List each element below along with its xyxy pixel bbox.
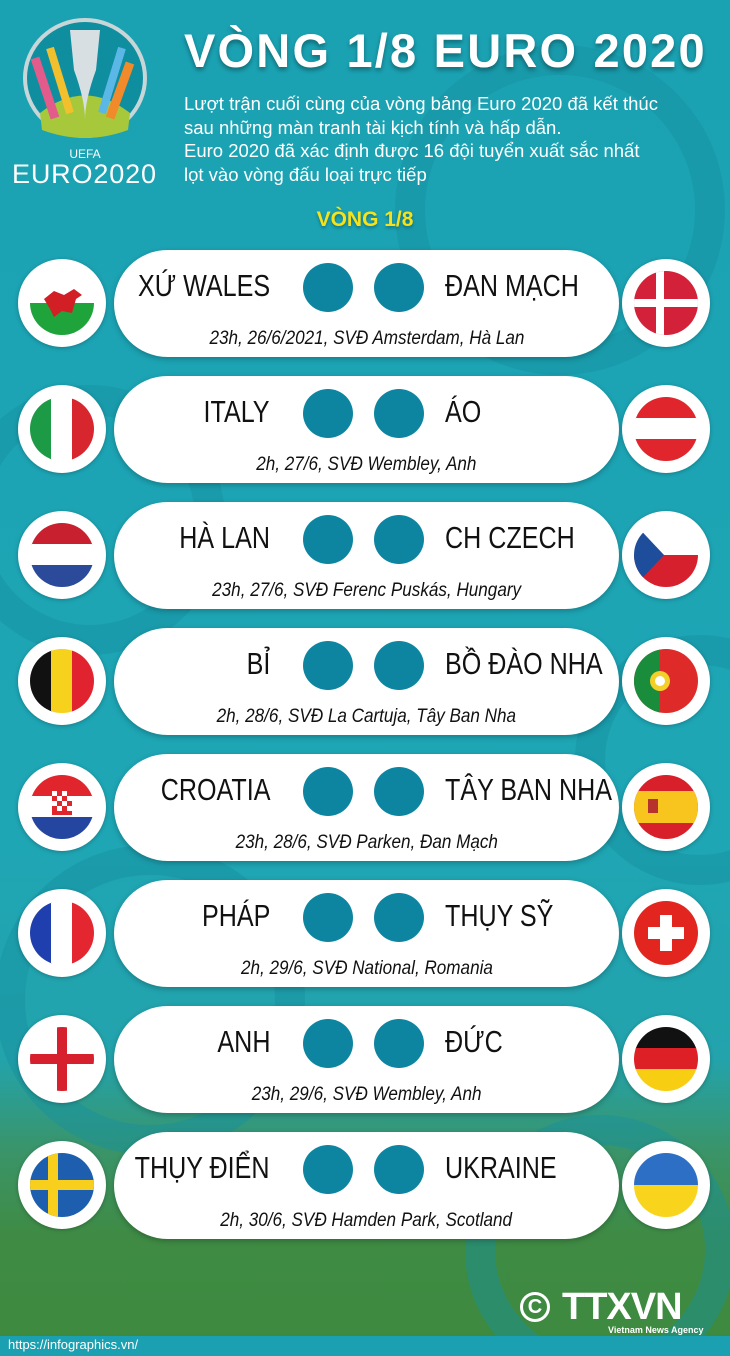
match 5: TÂY BAN NHA [445, 772, 612, 807]
match 5 [16, 754, 712, 866]
logo: TTXVN copyright: Vietnam News Agency [608, 1325, 704, 1335]
intro text [184, 93, 658, 185]
match 4: BỒ ĐÀO NHA [445, 646, 603, 681]
match 7: ĐỨC [445, 1024, 503, 1059]
intro text: lọt vào vòng đấu loại trực tiếp [184, 164, 427, 184]
match 1: ĐAN MẠCH [445, 268, 579, 303]
match 5: 23h, 28/6, SVĐ Parken, Đan Mạch [235, 832, 498, 853]
match 3 [16, 502, 712, 614]
match 3: HÀ LAN [179, 520, 270, 555]
logo: TTXVN copyright: TTXVN [562, 1286, 682, 1328]
match 3: CH CZECH [445, 520, 575, 555]
logo: euro 2020 [12, 18, 156, 188]
match 4: 2h, 28/6, SVĐ La Cartuja, Tây Ban Nha [217, 706, 516, 727]
logo: euro 2020: UEFA [69, 147, 101, 161]
match 2: 2h, 27/6, SVĐ Wembley, Anh [256, 454, 477, 475]
match 8: THỤY ĐIỂN [135, 1150, 270, 1185]
match 1 [16, 250, 712, 362]
subheading: VÒNG 1/8 [317, 208, 413, 231]
logo: TTXVN copyright [520, 1286, 704, 1335]
match 8: UKRAINE [445, 1150, 557, 1185]
intro text: Lượt trận cuối cùng của vòng bảng Euro 2020 đã kết thúc [184, 93, 658, 114]
match 6: PHÁP [202, 898, 270, 933]
logo: TTXVN copyright: C [528, 1296, 542, 1318]
match 6 [16, 880, 712, 992]
match 1: 23h, 26/6/2021, SVĐ Amsterdam, Hà Lan [209, 328, 524, 349]
match 2 [16, 376, 712, 488]
match 2: ITALY [204, 394, 270, 429]
match 7: 23h, 29/6, SVĐ Wembley, Anh [252, 1084, 481, 1105]
intro text: Euro 2020 đã xác định được 16 đội tuyển xuất sắc nhất [184, 140, 639, 161]
match 8 [16, 1132, 712, 1243]
match 2: ÁO [445, 394, 481, 429]
match 4: BỈ [246, 646, 270, 681]
match 6: THỤY SỸ [445, 898, 553, 933]
title: VÒNG 1/8 EURO 2020 [184, 24, 707, 77]
match 1: XỨ WALES [138, 268, 270, 303]
match 4 [16, 628, 712, 740]
match 3: 23h, 27/6, SVĐ Ferenc Puskás, Hungary [212, 580, 521, 601]
match 7 [16, 1006, 712, 1118]
intro text: sau những màn tranh tài kịch tính và hấp dẫn. [184, 116, 562, 138]
match 5: CROATIA [160, 772, 270, 807]
match 8: 2h, 30/6, SVĐ Hamden Park, Scotland [221, 1210, 512, 1231]
match 6: 2h, 29/6, SVĐ National, Romania [241, 958, 492, 979]
footer url: https://infographics.vn/ [8, 1337, 138, 1352]
match 7: ANH [217, 1024, 270, 1059]
